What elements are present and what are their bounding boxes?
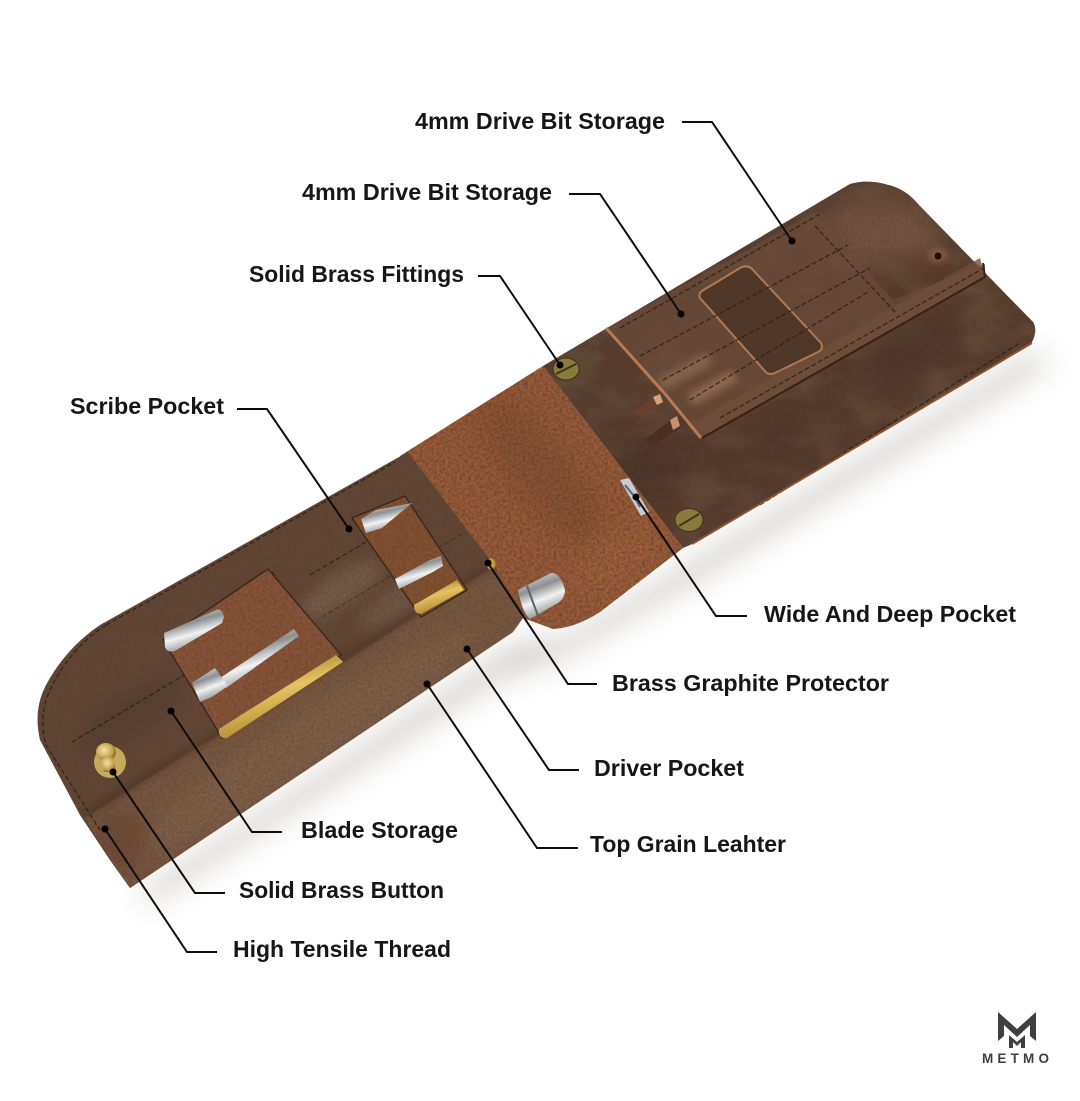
callout: 4mm Drive Bit Storage lower xyxy=(302,179,684,318)
icon: flat driver bit xyxy=(395,556,443,589)
logo: METMO: METMO xyxy=(982,1051,1049,1066)
stitching rows xyxy=(620,214,984,418)
callout: Driver Pocket xyxy=(464,646,744,781)
callout: Wide And Deep Pocket xyxy=(632,494,1016,627)
callout: Solid Brass Button: Solid Brass Button xyxy=(239,877,444,903)
panel: suede interior xyxy=(395,360,690,635)
pocket window: small xyxy=(350,494,470,619)
icon: snap hole xyxy=(928,248,948,262)
icon: metal fragment at deep pocket xyxy=(620,478,649,516)
callout: Brass Graphite Protector xyxy=(484,560,889,696)
pocket highlights xyxy=(660,358,710,385)
icon: brass fitting lower xyxy=(675,508,703,532)
callout: Top Grain Leahter: Top Grain Leahter xyxy=(590,831,786,857)
callout: Solid Brass Button xyxy=(110,768,444,903)
callout: Solid Brass Fittings: Solid Brass Fittings xyxy=(249,261,464,287)
panel: right leather flap xyxy=(540,175,1040,555)
callout: Blade Storage: Blade Storage xyxy=(301,817,458,843)
icon: brass graphite protector tip xyxy=(486,558,496,570)
callout: 4mm Drive Bit Storage upper xyxy=(415,108,796,244)
callout: 4mm Drive Bit Storage upper: 4mm Drive Bit Storage xyxy=(415,108,665,134)
callout: Scribe Pocket: Scribe Pocket xyxy=(70,393,224,419)
callout: Solid Brass Fittings xyxy=(249,261,564,368)
logo: METMO xyxy=(982,1012,1049,1066)
icon: chrome sleeve xyxy=(164,610,224,652)
callout: Brass Graphite Protector: Brass Graphite Protector xyxy=(612,670,889,696)
callout: 4mm Drive Bit Storage lower: 4mm Drive Bit Storage xyxy=(302,179,552,205)
icon: steel pin tool xyxy=(192,629,299,702)
panel: left leather panel and roll xyxy=(30,445,535,895)
icon: scribe spike xyxy=(361,503,412,533)
drop shadow under leather roll xyxy=(140,350,1050,905)
icon: small brass rod xyxy=(414,580,464,614)
callout: Top Grain Leahter xyxy=(424,680,786,857)
icon: brass rod xyxy=(219,655,343,738)
cut edge xyxy=(606,328,701,438)
callout: High Tensile Thread xyxy=(102,826,451,962)
pocket window: large xyxy=(160,565,345,740)
lower rolled flap xyxy=(85,562,530,892)
panel: tool pockets on right flap xyxy=(606,212,985,438)
callout: Wide And Deep Pocket: Wide And Deep Pocket xyxy=(764,601,1016,627)
strap seam xyxy=(702,263,985,438)
callout: Driver Pocket: Driver Pocket xyxy=(594,755,744,781)
icon: chrome end cap xyxy=(518,573,565,619)
pocket window xyxy=(699,266,822,374)
callout: Scribe Pocket xyxy=(70,393,352,532)
callout: High Tensile Thread: High Tensile Thread xyxy=(233,936,451,962)
callout: Blade Storage xyxy=(168,708,458,843)
icon: solid brass button xyxy=(94,743,126,778)
icon: brass fitting upper xyxy=(553,358,579,380)
icon: drive bits in pockets xyxy=(632,394,682,444)
strap band xyxy=(690,258,985,438)
